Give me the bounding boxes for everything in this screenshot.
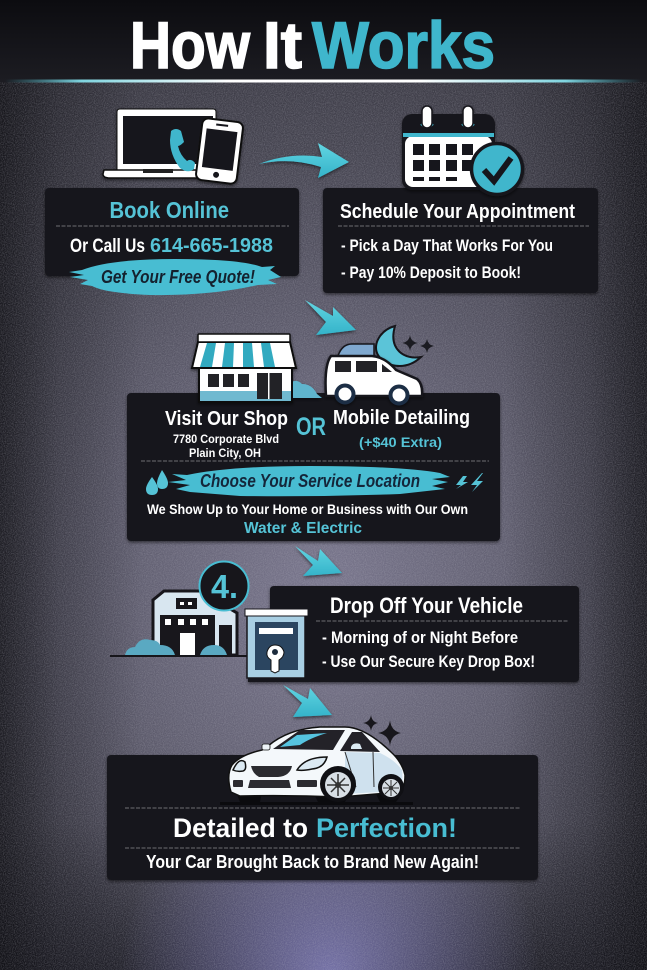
badge: step 4	[200, 562, 248, 610]
panel: service location	[127, 393, 500, 541]
icon: sparkles	[363, 715, 401, 746]
text: water and electric: Water & Electric	[244, 520, 362, 537]
title: Works	[312, 8, 495, 82]
heading: book online: Book Online	[110, 197, 229, 223]
icon: water drops	[146, 470, 168, 495]
heading: mobile detailing: Mobile Detailing	[333, 407, 470, 429]
text: address: 7780 Corporate Blvd	[173, 432, 279, 446]
title	[130, 8, 495, 82]
icon: laptop and phone	[103, 109, 244, 184]
text: phone number: 614-665-1988	[150, 235, 273, 257]
icon: building	[110, 591, 250, 657]
icon: lightning bolts	[456, 473, 483, 492]
icon: moon and stars	[376, 326, 434, 366]
title: How	[130, 8, 251, 82]
brush: get your free quote	[69, 259, 281, 295]
brush: get your free quote: Get Your Free Quote!	[101, 267, 255, 287]
arrow: to location	[305, 300, 356, 335]
text: tagline: Your Car Brought Back to Brand New Again!	[146, 852, 479, 872]
heading: visit our shop: Visit Our Shop	[165, 408, 288, 430]
icon: calendar	[402, 106, 522, 194]
brush: choose your service location: Choose Your Service Location	[200, 471, 420, 491]
panel: schedule	[323, 188, 598, 293]
arrow: to schedule	[259, 143, 349, 178]
list: drop off details	[322, 628, 535, 671]
text: address	[173, 432, 279, 460]
list: schedule details: - Pick a Day That Works For You	[341, 236, 553, 255]
list: drop off details: - Morning of or Night Before	[322, 628, 518, 647]
title: It	[263, 8, 302, 82]
list: schedule details: - Pay 10% Deposit to Book!	[341, 263, 521, 282]
heading: perfection: Perfection!	[316, 813, 457, 843]
icon: key drop box	[245, 609, 308, 678]
badge: step 4: 4.	[211, 568, 238, 605]
arrow: to drop off	[295, 546, 342, 576]
text: address: Plain City, OH	[189, 446, 261, 460]
text: extra charge: (+$40 Extra)	[359, 434, 442, 450]
text: or: OR	[296, 413, 326, 441]
icon: shop	[192, 334, 322, 402]
icon: van	[326, 344, 422, 404]
title rule	[5, 80, 642, 82]
panel: book online	[45, 188, 299, 276]
panel: detailed to perfection	[107, 755, 538, 880]
heading: detailed: Detailed to	[173, 813, 308, 843]
brush: choose your service location	[168, 466, 450, 496]
panel: drop off	[248, 586, 579, 682]
list: drop off details: - Use Our Secure Key Drop Box!	[322, 652, 535, 671]
text: we show up: We Show Up to Your Home or Business with Our Own	[147, 501, 468, 517]
list: schedule details	[341, 236, 553, 282]
arrow: to car	[283, 685, 332, 717]
heading: schedule: Schedule Your Appointment	[340, 201, 575, 223]
heading: drop off: Drop Off Your Vehicle	[330, 593, 523, 618]
text: call us: Or Call Us	[70, 236, 145, 257]
icon: car	[220, 727, 413, 805]
